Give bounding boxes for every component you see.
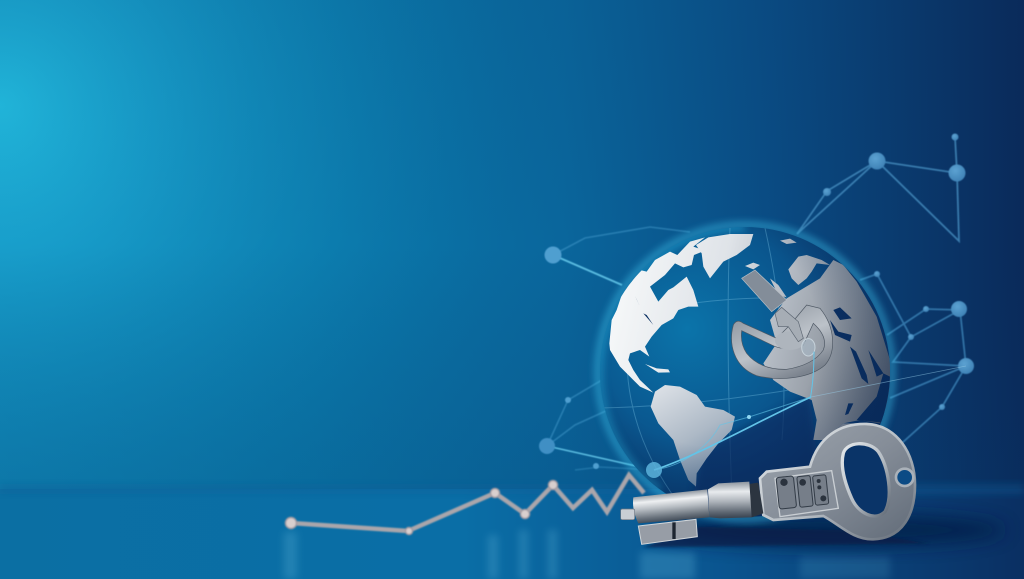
graticule lines [604, 228, 788, 494]
left rim glow [599, 227, 745, 490]
lock shackle on globe [732, 270, 833, 397]
eurasia and africa [763, 260, 890, 440]
network nodes: upper right [823, 134, 966, 196]
floor surface [0, 484, 1024, 579]
key plate [775, 471, 838, 517]
globe shadow on floor [655, 513, 1005, 547]
greenland [696, 234, 753, 278]
network lines: left [547, 227, 690, 470]
line chart on floor [286, 475, 644, 534]
dark lower ocean [694, 397, 814, 516]
glass loop [802, 339, 815, 356]
globe [598, 225, 892, 525]
network lines: upper right [797, 137, 959, 241]
globe map [599, 227, 890, 525]
shackle hub [775, 331, 805, 350]
key tip [621, 509, 635, 520]
key shaft [633, 482, 752, 523]
network nodes: left [539, 246, 599, 469]
cable [811, 352, 814, 397]
data lines across globe [654, 366, 966, 470]
british isles [770, 278, 787, 297]
iceland and small islands [645, 239, 797, 373]
globe halo [598, 225, 892, 519]
key bit [638, 519, 697, 544]
north america [609, 237, 705, 393]
key ring hole [896, 469, 913, 486]
key shank [775, 307, 803, 342]
key bit notch [672, 522, 676, 539]
key blade [742, 270, 787, 312]
network lines: right [860, 274, 966, 443]
key collar [748, 483, 763, 517]
south america [651, 385, 735, 487]
chart line [291, 475, 644, 531]
shackle ring [732, 305, 833, 379]
key [621, 424, 930, 547]
sphere shading [600, 227, 890, 517]
key handle [760, 424, 915, 539]
network nodes: right [874, 271, 974, 410]
continents, in zoom-crop coordinates [609, 234, 890, 440]
chart points [286, 480, 558, 534]
floor reflections [284, 530, 890, 579]
data node on globe [646, 415, 751, 478]
globe ocean [600, 227, 890, 517]
key shadow [643, 527, 930, 547]
key handle opening [842, 444, 889, 516]
inland seas and dark detail [635, 296, 890, 430]
europe [788, 255, 830, 285]
